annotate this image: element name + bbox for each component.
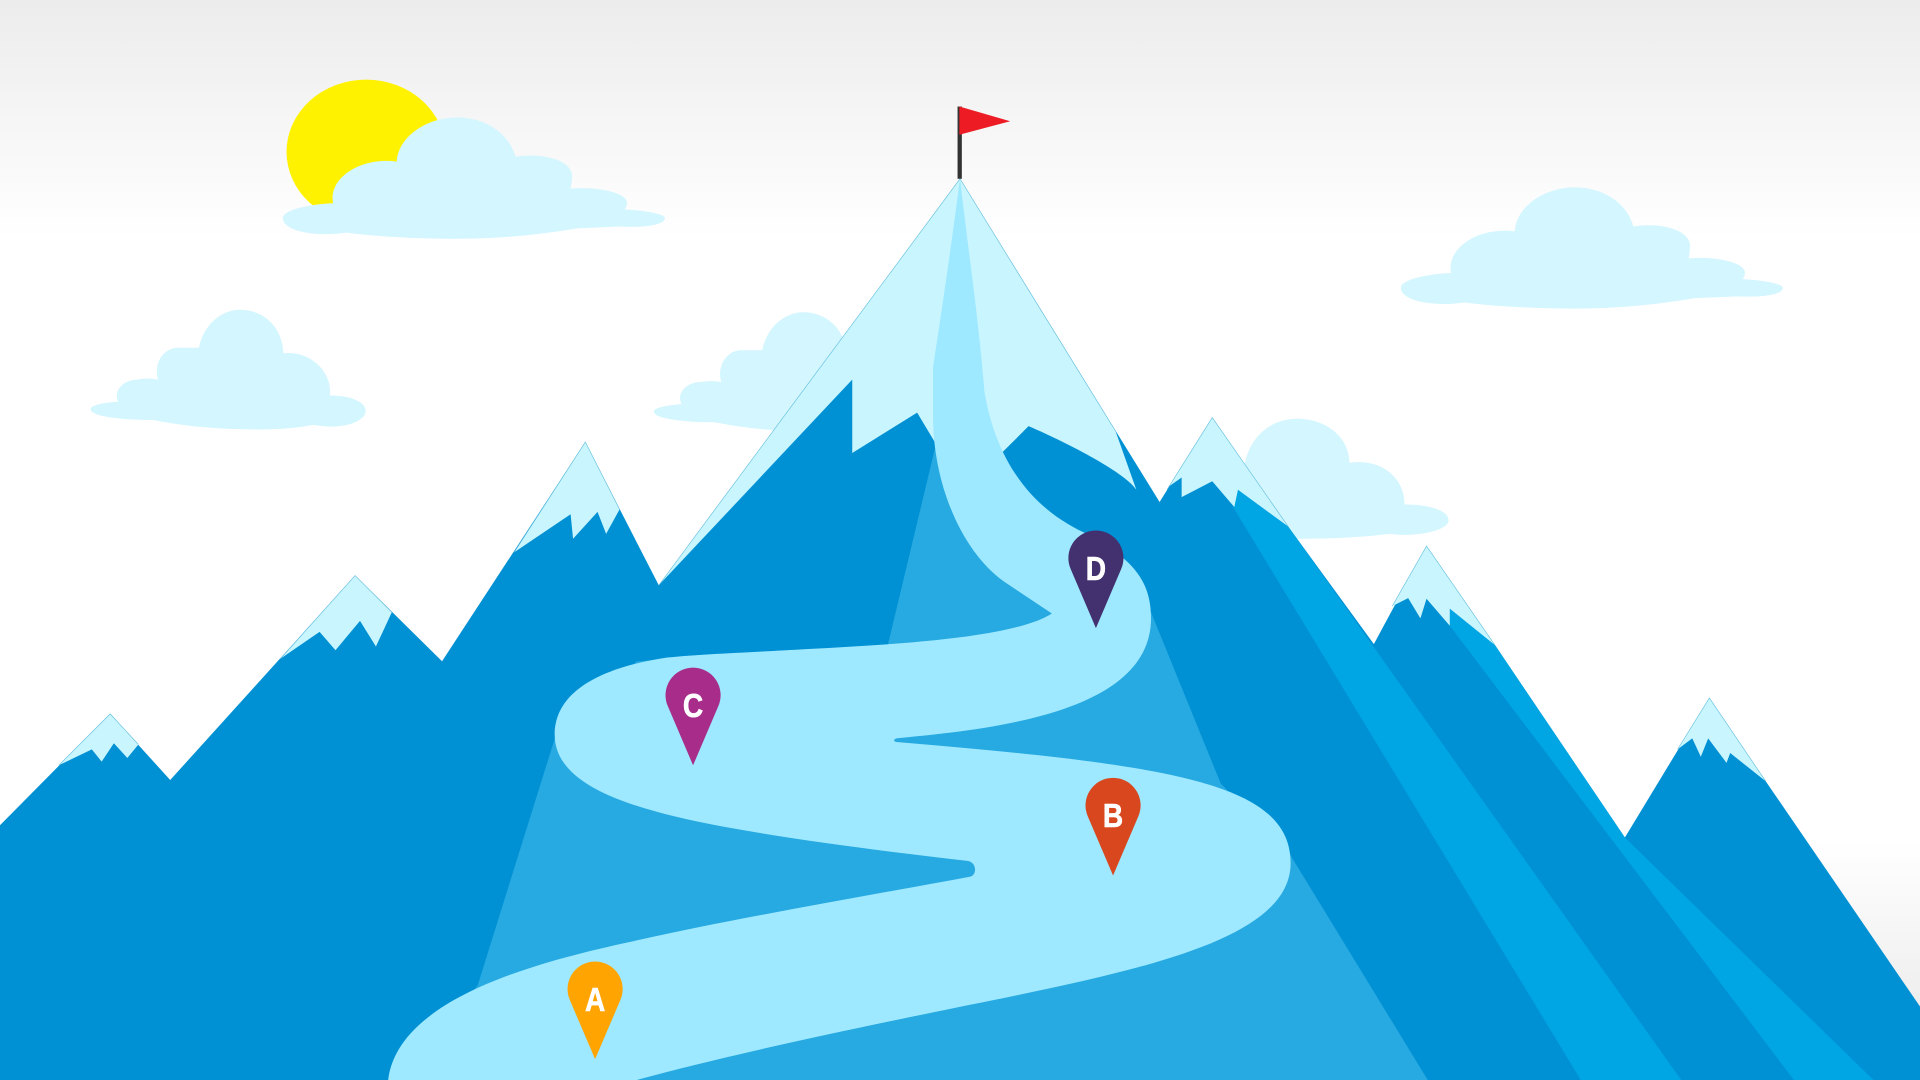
winding path — [388, 179, 1291, 1080]
snow cap: third peak — [514, 442, 620, 552]
snow cap: second peak — [280, 576, 392, 659]
main mountain lit face — [389, 441, 1428, 1080]
cloud: left — [91, 310, 366, 429]
pin B: B — [1103, 797, 1123, 835]
snow cap outlines — [59, 179, 1766, 781]
flag pole — [958, 107, 962, 179]
pin C: C — [683, 687, 703, 724]
pin A: A — [585, 981, 605, 1018]
pin B — [1086, 778, 1141, 876]
light ridge strip: middle — [1233, 490, 1681, 1080]
pin D: D — [1086, 550, 1106, 587]
pin C — [666, 668, 721, 765]
sun — [287, 80, 446, 224]
red pennant — [959, 107, 1010, 135]
snow caps — [59, 179, 1766, 781]
snow cap: right shoulder peak — [1167, 418, 1288, 527]
cloud: over the sun — [283, 118, 665, 239]
snow cap: far right peak — [1678, 698, 1766, 781]
snow cap: summit — [659, 179, 1136, 585]
cloud: behind the right ridge — [1224, 419, 1449, 539]
flag on the summit — [958, 107, 1010, 179]
snow cap: right peak — [1392, 546, 1495, 645]
snow cap: far left peak — [59, 714, 138, 765]
cloud: top right — [1401, 187, 1783, 309]
cloud: behind the summit — [654, 312, 929, 432]
pin D — [1068, 530, 1123, 628]
light ridge strip: right — [1450, 609, 1873, 1080]
pin A — [568, 962, 623, 1059]
